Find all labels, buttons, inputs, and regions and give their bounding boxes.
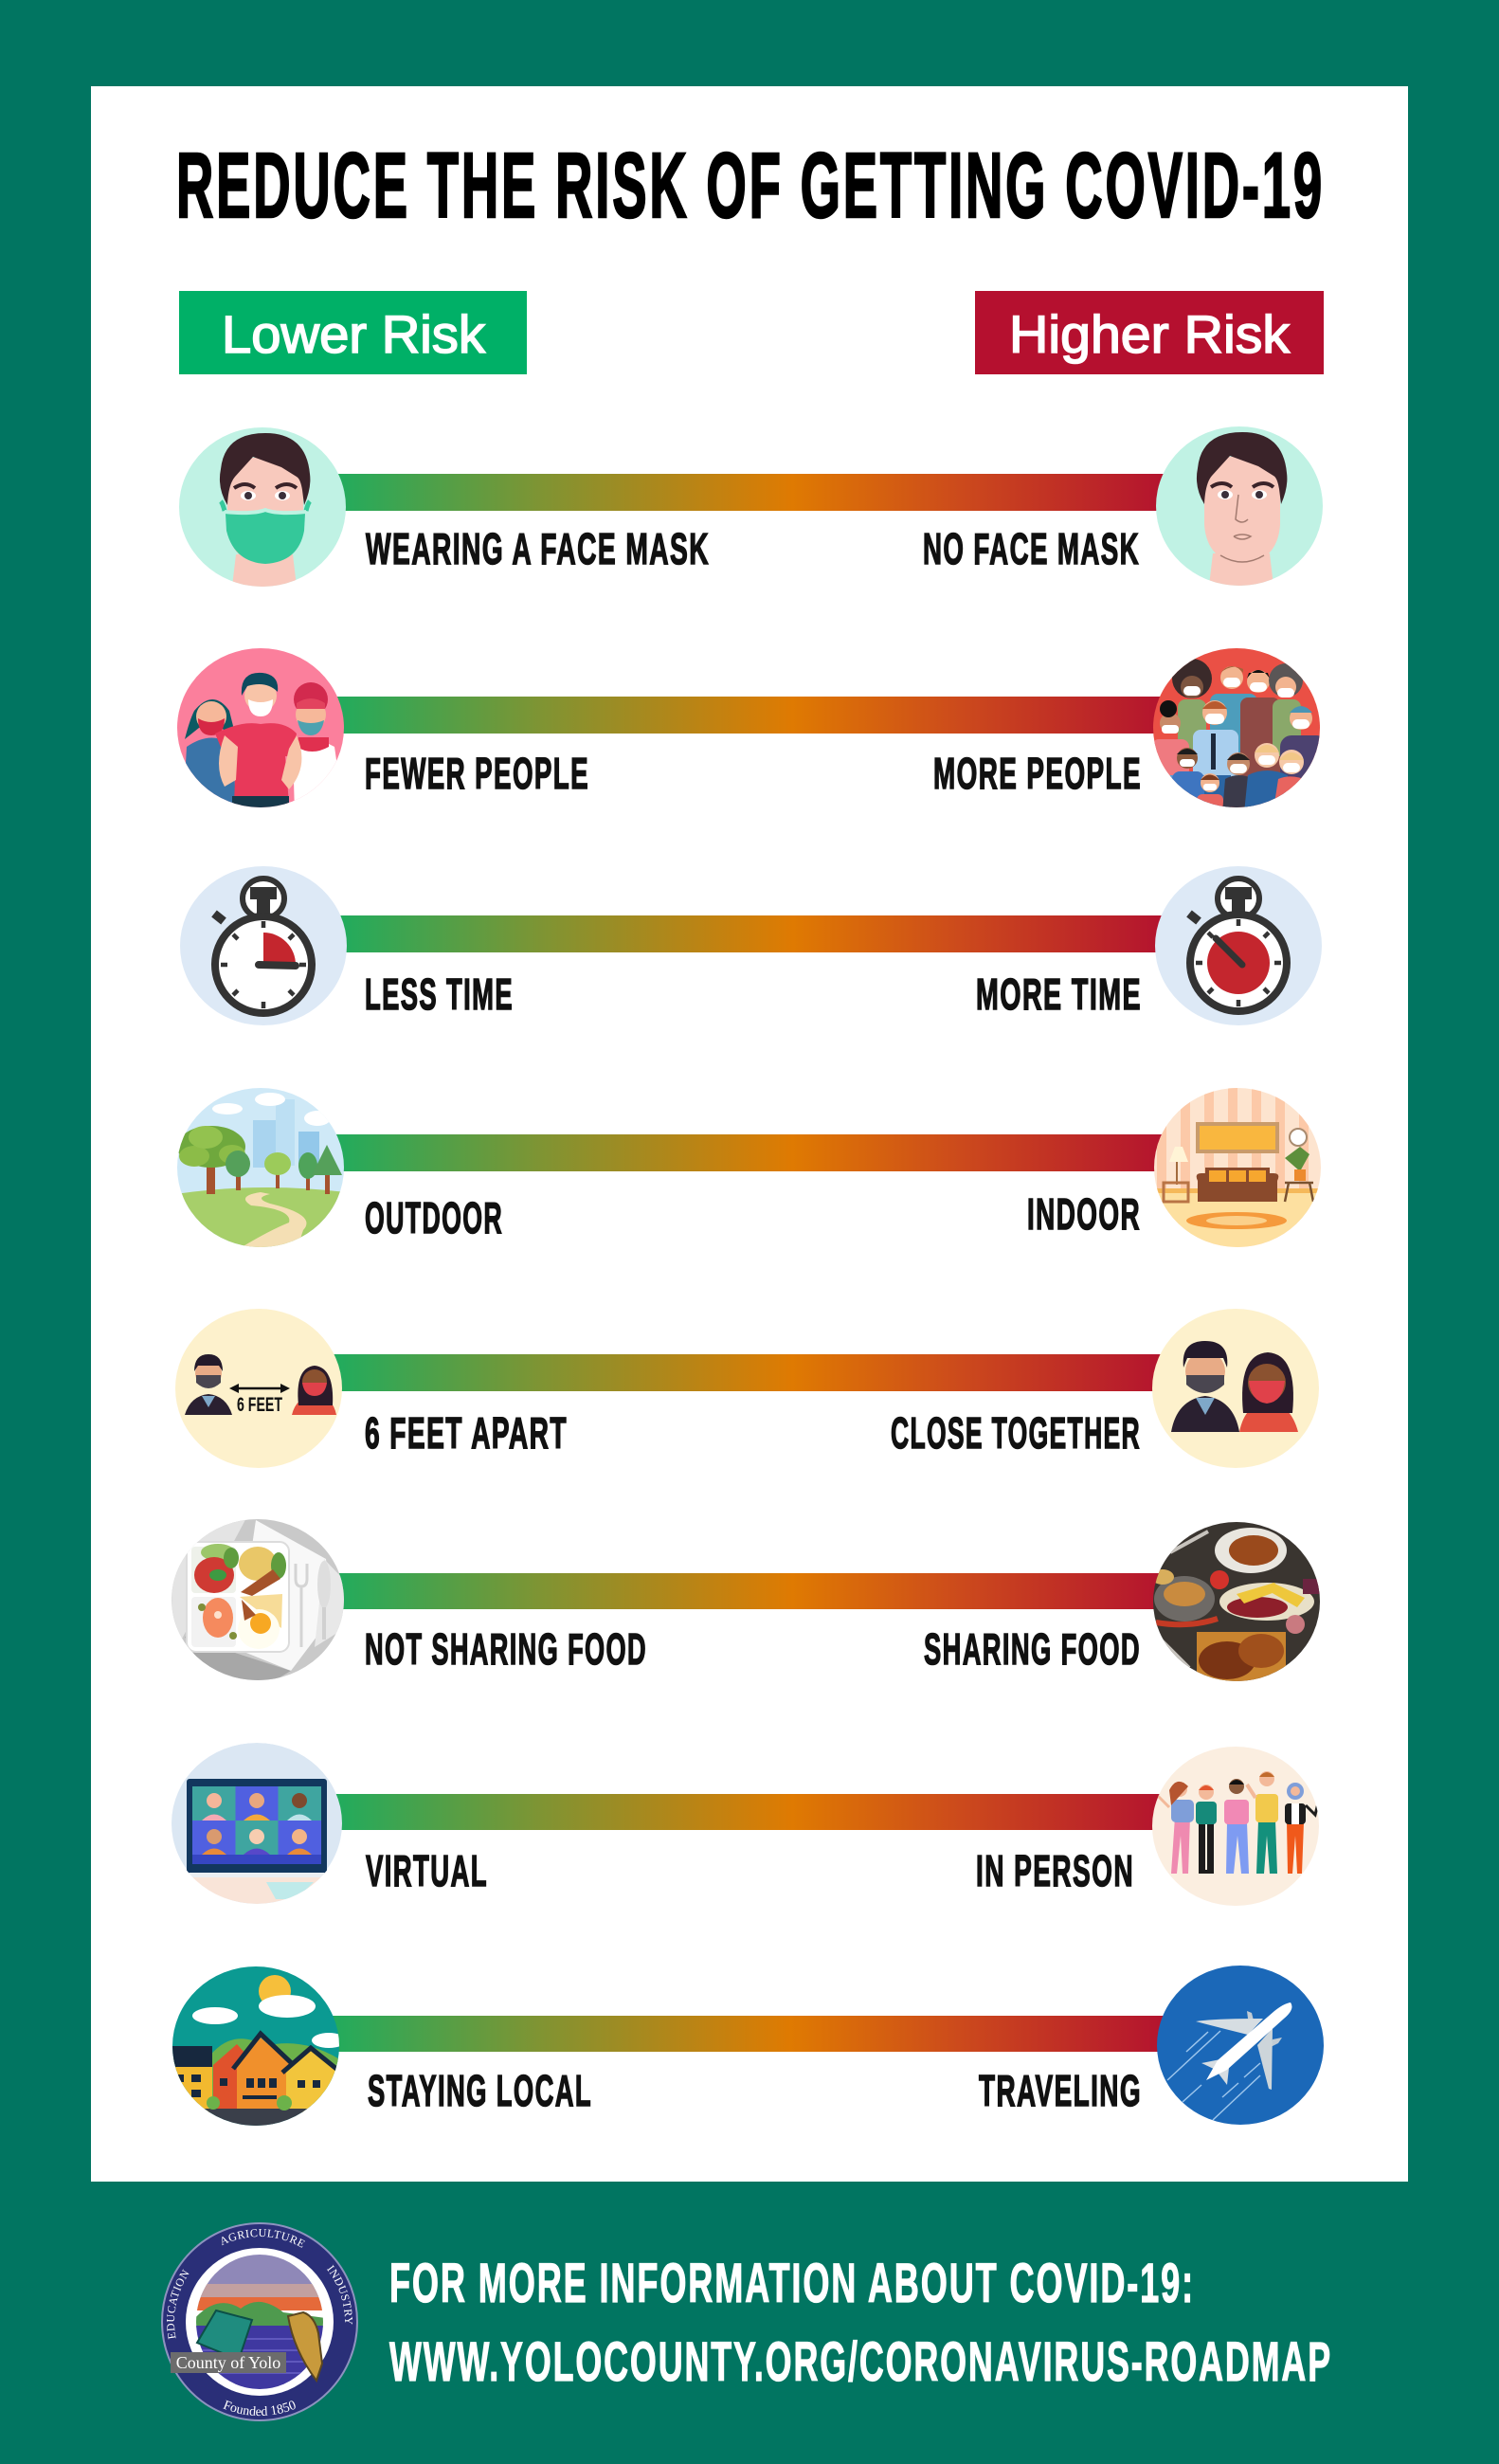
gradient bar [332, 1354, 1169, 1391]
gradient bar [332, 1134, 1169, 1171]
seal text: INDUSTRY [326, 2265, 352, 2325]
seal text [167, 2229, 352, 2417]
label: staying local: STAYING LOCAL [368, 2066, 592, 2115]
icon: group of five people [1150, 1741, 1321, 1911]
seal text: Founded 1850 [223, 2400, 296, 2417]
label: more time: MORE TIME [976, 969, 1142, 1019]
icon: two people six feet apart: 6 FEET [237, 1394, 282, 1416]
gradient bar [332, 1794, 1169, 1830]
seal text: AGRICULTURE [222, 2229, 305, 2248]
label: not sharing food: NOT SHARING FOOD [365, 1624, 647, 1674]
icon: virtual meeting on laptop [172, 1743, 342, 1904]
gradient bar [332, 697, 1169, 734]
label: indoor: INDOOR [1027, 1189, 1141, 1239]
label: less time: LESS TIME [365, 969, 514, 1019]
icon: man wearing green mask [177, 422, 348, 592]
legend: lower risk: Lower Risk [222, 304, 486, 364]
label: in person: IN PERSON [976, 1846, 1134, 1895]
label: 6 feet apart: 6 FEET APART [365, 1408, 568, 1458]
label: close together: CLOSE TOGETHER [891, 1408, 1141, 1458]
row: people count [175, 643, 1327, 815]
label: fewer people: FEWER PEOPLE [365, 749, 589, 798]
footer text [389, 2253, 1332, 2393]
row: food [171, 1514, 1322, 1689]
icon: two people close together [1150, 1303, 1321, 1474]
row: travel [171, 1960, 1326, 2131]
gradient bar [332, 474, 1169, 511]
label: more people: MORE PEOPLE [933, 749, 1142, 798]
icon: three masked people on pink [175, 643, 346, 815]
label: sharing food: SHARING FOOD [924, 1624, 1141, 1674]
row: distance [173, 1303, 1321, 1474]
label: traveling: TRAVELING [979, 2066, 1142, 2115]
county name plate: County of Yolo [176, 2353, 280, 2372]
icon: stopwatch with small red wedge [178, 861, 349, 1031]
legend: lower risk [179, 291, 527, 374]
seal text: EDUCATION [167, 2269, 190, 2339]
icon: indoor living room [1152, 1082, 1323, 1253]
icon: airplane on blue [1155, 1960, 1326, 2130]
icon: two people six feet apart [173, 1303, 344, 1474]
legend: higher risk: Higher Risk [1009, 304, 1291, 364]
icon: individual food tray [171, 1514, 345, 1685]
logo: county of yolo seal [161, 2222, 358, 2421]
row: location [175, 1082, 1323, 1253]
gradient bar [332, 1573, 1169, 1609]
gradient bar [336, 915, 1166, 952]
icon: crowd wearing masks on red [1153, 648, 1320, 807]
icon: stopwatch with large red wedge [1153, 861, 1324, 1031]
label: wearing a face mask: WEARING A FACE MASK [366, 524, 710, 573]
row: meeting [172, 1741, 1321, 1911]
icon: shared barbecue platters [1151, 1516, 1322, 1689]
row: face mask [177, 421, 1325, 592]
label: no face mask: NO FACE MASK [923, 524, 1140, 573]
legend: higher risk [975, 291, 1324, 374]
icon: local village [172, 1966, 339, 2126]
label: virtual: VIRTUAL [366, 1846, 488, 1895]
icon: man without mask [1154, 421, 1325, 591]
row: time [178, 861, 1324, 1031]
icon: outdoor park [175, 1082, 346, 1253]
panel: white content area [91, 86, 1408, 2182]
gradient bar [327, 2016, 1169, 2052]
label: outdoor: OUTDOOR [365, 1193, 503, 1242]
